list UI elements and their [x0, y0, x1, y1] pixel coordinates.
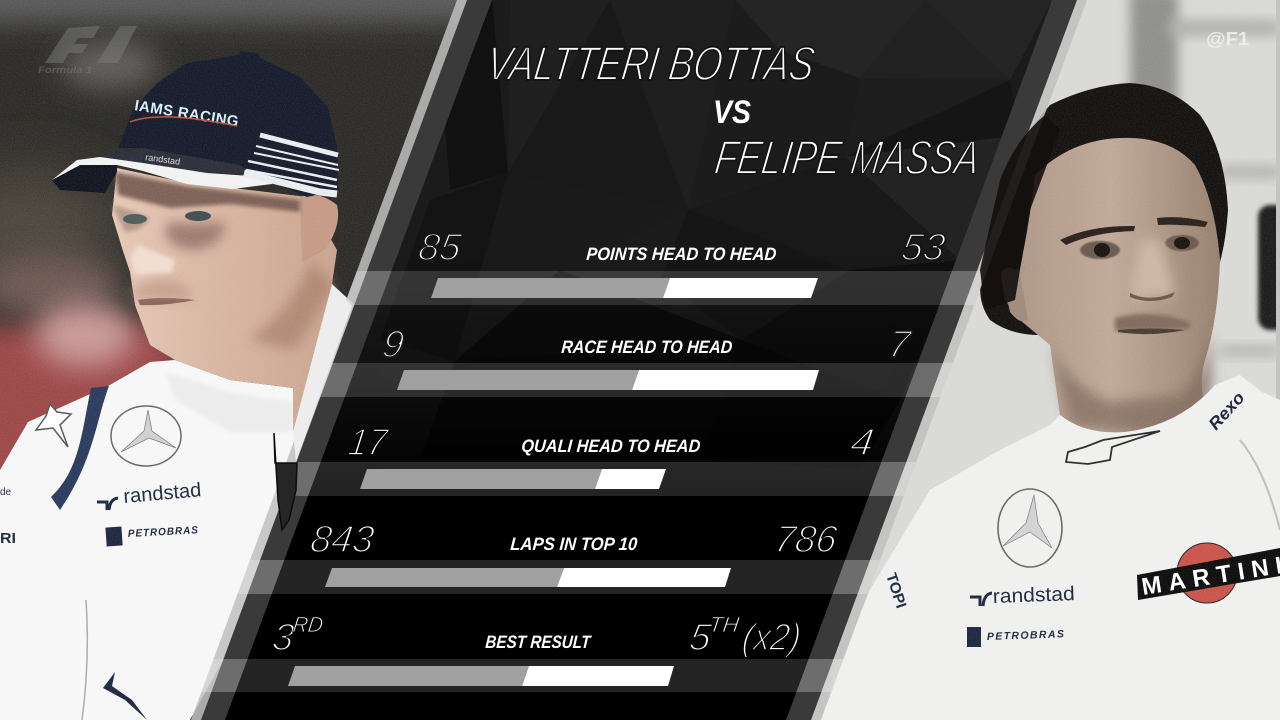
panel grey strip — [201, 0, 1077, 720]
Massa hair overlap on panel edge — [980, 115, 1060, 310]
blurred background — [780, 0, 1280, 720]
sleeve small text: de — [0, 487, 12, 498]
Formula 1 wordmark: Formula 1 — [38, 65, 92, 76]
Bottas quali wins: 17 — [346, 421, 391, 464]
lower suit mark — [103, 672, 147, 720]
panel outer light strip — [191, 0, 1087, 720]
Bottas bar — [288, 666, 529, 686]
row: race head to head — [380, 323, 914, 390]
Massa bar — [663, 278, 818, 298]
Bottas bar — [325, 568, 564, 587]
Bottas race wins: 9 — [380, 323, 407, 366]
driver face — [1001, 138, 1220, 445]
Massa best result: 5 — [687, 616, 715, 659]
cap red line — [130, 117, 237, 126]
row: quali head to head — [346, 421, 877, 489]
Bottas bar — [431, 278, 670, 298]
driver race suit — [0, 284, 360, 720]
row: laps in top 10 — [308, 518, 840, 587]
eyes — [1080, 235, 1199, 259]
label: RACE HEAD TO HEAD — [561, 337, 733, 357]
Bottas points: 85 — [416, 226, 465, 269]
panel dark body — [225, 0, 1052, 720]
cap — [52, 51, 339, 197]
Bottas best result: 3 — [270, 616, 297, 659]
collar text: Rexo — [1205, 388, 1248, 434]
photo: Felipe Massa — [780, 0, 1280, 720]
driver head — [112, 168, 338, 432]
Massa quali wins: 4 — [848, 421, 877, 464]
Massa bar — [595, 469, 666, 489]
Petrobras logo — [967, 627, 981, 647]
eyes — [123, 211, 211, 224]
Massa bar — [632, 370, 819, 390]
Massa bar — [522, 666, 674, 686]
Petrobras text: PETROBRAS — [128, 524, 199, 540]
@F1 handle: @F1 — [1206, 29, 1249, 49]
randstad mark — [97, 498, 118, 510]
low-poly texture — [200, 0, 1100, 720]
ordinal suffix: TH — [707, 612, 741, 637]
sleeve sponsor text: RI — [0, 530, 16, 547]
Bottas collar over panel strip — [293, 284, 352, 462]
eyebrows — [1060, 217, 1208, 245]
heading: vs: VS — [713, 94, 752, 130]
randstad text: randstad — [992, 583, 1075, 608]
Bottas laps: 843 — [308, 518, 377, 561]
cap team text: IAMS RACING — [133, 97, 241, 131]
star logo — [36, 404, 71, 447]
heading: Valtteri Bottas: VALTTERI BOTTAS — [483, 37, 818, 91]
Bottas bar — [360, 469, 602, 489]
sleeve text: TOPI — [882, 571, 909, 610]
cap side stripes — [244, 135, 339, 194]
photo: Valtteri Bottas — [0, 0, 467, 720]
heading: Felipe Massa: FELIPE MASSA — [711, 131, 983, 185]
label: LAPS IN TOP 10 — [510, 534, 638, 554]
F1 logo — [38, 26, 137, 76]
Massa points: 53 — [899, 226, 948, 269]
label: QUALI HEAD TO HEAD — [521, 436, 701, 456]
Mercedes star badge — [111, 406, 181, 466]
randstad mark — [970, 593, 992, 606]
Mercedes star badge — [998, 489, 1062, 567]
ordinal suffix: RD — [291, 612, 325, 637]
central stats panel — [180, 0, 1100, 720]
row: best result — [270, 612, 804, 686]
driver hair — [980, 83, 1228, 335]
blurred background — [0, 0, 467, 720]
cap sponsor text: randstad — [145, 152, 181, 167]
brighter bands on edge strips — [206, 271, 982, 692]
blue shoulder stripe — [51, 386, 109, 510]
Petrobras text: PETROBRAS — [987, 628, 1064, 643]
driver race suit — [820, 375, 1280, 720]
Massa laps: 786 — [772, 518, 840, 561]
collar logo — [1066, 431, 1160, 464]
Massa bar — [557, 568, 731, 587]
Martini logo: MARTINI — [1140, 552, 1280, 601]
translucent row bands — [206, 271, 982, 692]
label: POINTS HEAD TO HEAD — [586, 244, 777, 264]
F1 logo mark — [45, 26, 137, 63]
Massa race wins: 7 — [886, 323, 914, 366]
row: points head to head — [416, 226, 948, 298]
Petrobras logo — [105, 526, 123, 547]
Bottas bar — [397, 370, 639, 390]
multiplier: (x2) — [740, 616, 804, 659]
Bottas zipper over panel strip — [274, 433, 297, 530]
randstad text: randstad — [123, 479, 202, 508]
label: BEST RESULT — [485, 632, 593, 652]
